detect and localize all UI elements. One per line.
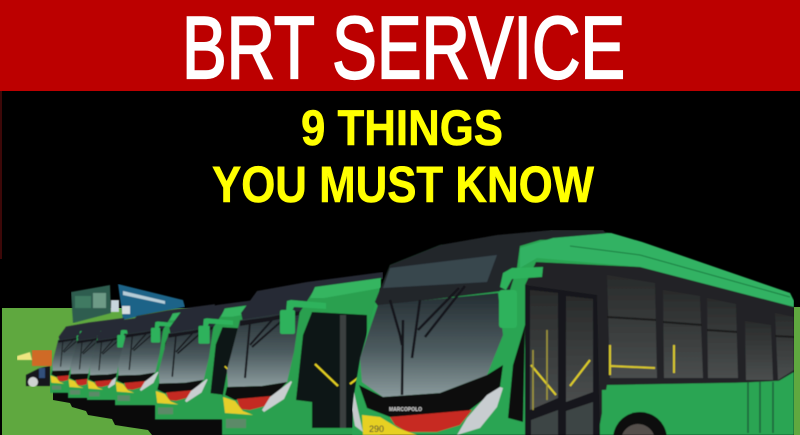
ground shadows <box>53 375 260 435</box>
windshield <box>360 293 503 397</box>
window rails <box>610 345 674 375</box>
bus 6 <box>68 316 148 398</box>
red stripe <box>390 410 472 432</box>
billboards <box>71 284 185 323</box>
fleet number: 290 <box>369 424 384 434</box>
green ground <box>2 307 800 435</box>
rear door glass <box>745 321 773 380</box>
door vertical rails <box>533 330 547 410</box>
main bus <box>352 230 794 435</box>
far buses row <box>50 272 383 435</box>
window 4 <box>775 313 794 380</box>
bus 4 <box>115 304 215 405</box>
title: BRT SERVICE <box>182 0 625 97</box>
headlight left <box>352 392 363 432</box>
door glass right <box>566 296 593 402</box>
window 3 <box>707 298 738 378</box>
mirror head <box>499 290 517 328</box>
roof line <box>570 246 790 297</box>
door handrails <box>531 360 590 395</box>
lower front band <box>359 365 503 417</box>
wipers <box>390 286 465 395</box>
yellow front <box>362 415 417 435</box>
door <box>525 285 600 435</box>
wheel <box>622 424 654 435</box>
window 2 <box>663 290 703 378</box>
main bus body <box>352 230 794 435</box>
badge: MARCOPOLO <box>389 407 422 413</box>
left edge stripe <box>0 91 2 259</box>
bus 7 <box>50 318 124 393</box>
side window band <box>525 262 794 435</box>
rear door lower <box>748 382 773 433</box>
wheel arch <box>613 412 667 435</box>
subtitle line 1: 9 THINGS <box>301 100 503 156</box>
destination sign <box>383 255 497 288</box>
door glass left <box>530 290 558 410</box>
lower side panel <box>602 380 794 435</box>
bus 3 <box>155 297 276 420</box>
window 1 <box>607 275 657 378</box>
door side window <box>508 325 525 422</box>
roof cap <box>375 230 611 306</box>
green roof <box>520 233 794 307</box>
mirror <box>500 267 543 290</box>
headlight right <box>457 387 503 435</box>
bus 2 <box>222 272 383 435</box>
header banner <box>0 0 800 91</box>
window dividers <box>607 317 794 337</box>
door lower glass <box>531 402 593 435</box>
side windows <box>607 275 794 380</box>
bus 5 <box>87 315 171 400</box>
truck <box>17 350 52 387</box>
subtitle line 2: YOU MUST KNOW <box>212 156 595 213</box>
